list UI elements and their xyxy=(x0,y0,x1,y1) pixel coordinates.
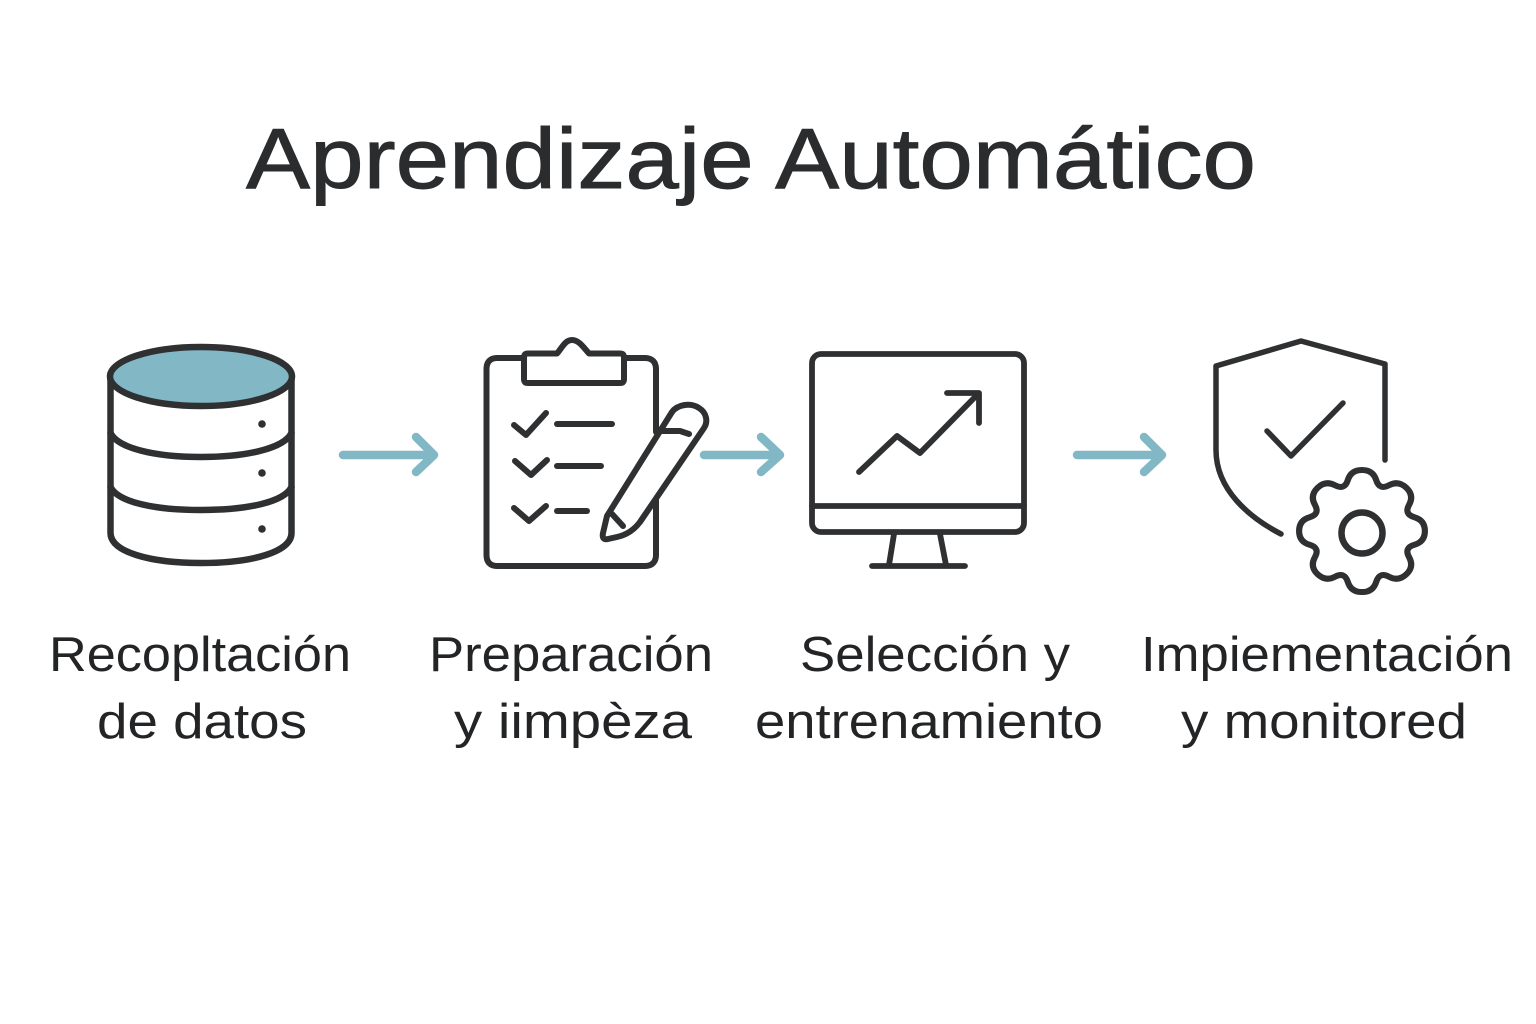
label: step 4: Impiementación xyxy=(1141,628,1513,682)
label: step 3: Selección y xyxy=(800,628,1071,682)
arrow 2 xyxy=(704,437,780,472)
label: step 1: Recopltación xyxy=(49,628,351,682)
arrow 3 xyxy=(1077,437,1162,472)
label: step 2: Preparación xyxy=(429,628,713,682)
label: step 4 line 2: y monitored xyxy=(1181,695,1467,749)
arrow 1 xyxy=(343,437,434,472)
label: step 3 line 2: entrenamiento xyxy=(755,695,1103,749)
icon: clipboard with checklist and pencil xyxy=(486,340,706,566)
label: step 2 line 2: y iimpèza xyxy=(454,695,693,749)
icon: database xyxy=(110,347,292,563)
icon: monitor with rising chart xyxy=(812,354,1024,566)
label: step 1 line 2: de datos xyxy=(97,695,307,749)
icon: shield with check and gear xyxy=(1216,341,1425,592)
title: Aprendizaje Automático xyxy=(246,112,1256,207)
